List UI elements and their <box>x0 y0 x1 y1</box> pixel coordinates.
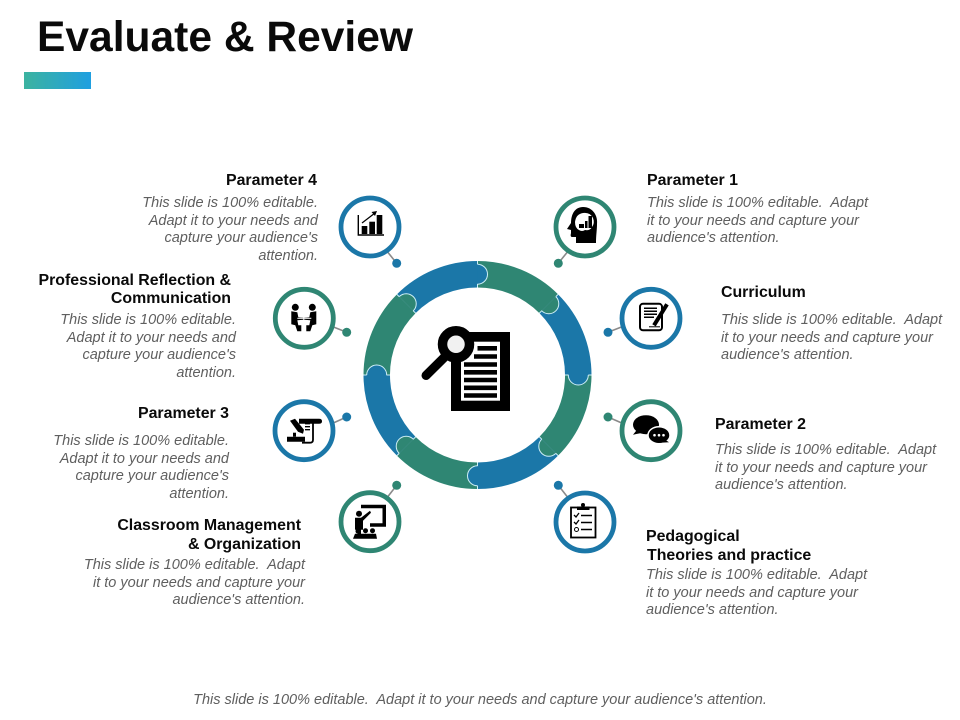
text: Curriculum: This slide is 100% editable. Adapt <box>721 312 943 328</box>
ring <box>275 402 333 460</box>
connector <box>386 250 401 268</box>
node: Parameter 3 <box>275 402 351 460</box>
text: Curriculum: Curriculum <box>721 284 806 301</box>
text: Pedagogical Theories and practice: Pedagogical <box>646 528 740 545</box>
node: Pedagogical <box>554 481 614 551</box>
icon: notepad and pen <box>640 304 667 330</box>
text: Parameter 2: it to your needs and capture your <box>715 460 928 476</box>
connector <box>604 326 624 337</box>
text: Parameter 2: This slide is 100% editable. Adapt <box>715 442 937 458</box>
text: Classroom Management & Organization: it to your needs and capture your <box>93 575 306 591</box>
text: Parameter 2 <box>715 416 937 493</box>
footer note: This slide is 100% editable. Adapt it to your needs and capture your audience's attention. <box>193 692 767 708</box>
text: Parameter 3: attention. <box>169 486 229 502</box>
text: Professional Reflection & Communication: attention. <box>176 365 236 381</box>
ring <box>341 493 399 551</box>
text: Curriculum: audience's attention. <box>721 347 854 363</box>
icon: bar chart <box>358 211 384 235</box>
connector <box>331 326 351 337</box>
ring <box>622 289 680 347</box>
text: Parameter 4: capture your audience's <box>164 230 318 246</box>
text: Classroom Management & Organization <box>84 517 306 608</box>
icon: scroll and quill <box>287 419 322 443</box>
text: Professional Reflection & Communication <box>38 272 237 381</box>
text: Pedagogical Theories and practice: it to your needs and capture your <box>646 585 859 601</box>
ring <box>556 493 614 551</box>
text: Professional Reflection & Communication: capture your audience's <box>82 347 236 363</box>
node: Professional Reflection <box>275 289 351 347</box>
text: Parameter 3: Adapt it to your needs and <box>59 451 230 467</box>
text: Pedagogical Theories and practice: This slide is 100% editable. Adapt <box>646 567 868 583</box>
connector <box>331 412 351 424</box>
text: Parameter 1: it to your needs and capture your <box>647 213 860 229</box>
text: Pedagogical Theories and practice <box>646 528 868 618</box>
node: Classroom Management <box>341 481 401 551</box>
node: Curriculum <box>604 289 680 347</box>
text: Parameter 4: This slide is 100% editable. <box>142 195 318 211</box>
text: Parameter 2: audience's attention. <box>715 477 848 493</box>
connector <box>554 481 569 499</box>
puzzle ring <box>340 237 615 513</box>
text: Professional Reflection & Communication: This slide is 100% editable. <box>60 312 236 328</box>
text: Classroom Management & Organization: & Organization <box>188 536 301 553</box>
text: Professional Reflection & Communication: Professional Reflection & <box>38 272 231 289</box>
text: Parameter 2: Parameter 2 <box>715 416 806 433</box>
ring <box>275 289 333 347</box>
icon: head with puzzle brain <box>567 207 597 243</box>
connector <box>554 250 569 268</box>
text: Parameter 3: capture your audience's <box>75 468 229 484</box>
text: Classroom Management & Organization: Classroom Management <box>117 517 302 534</box>
text: Parameter 1: This slide is 100% editable. Adapt <box>647 195 869 211</box>
icon: clipboard checklist <box>571 503 596 538</box>
title: Evaluate & Review <box>37 13 414 61</box>
text: Parameter 1: Parameter 1 <box>647 172 738 189</box>
text: Parameter 3: This slide is 100% editable. <box>53 433 229 449</box>
node: Parameter 4 <box>341 198 401 268</box>
node: Parameter 1 <box>554 198 614 268</box>
ring <box>622 402 680 460</box>
text: Curriculum: it to your needs and capture your <box>721 330 934 346</box>
text: Pedagogical Theories and practice: audience's attention. <box>646 602 779 618</box>
text: Parameter 1: audience's attention. <box>647 230 780 246</box>
text: Parameter 3 <box>53 405 230 502</box>
ring <box>556 198 614 256</box>
icon: two people at a table <box>291 304 316 331</box>
text: Parameter 4: Parameter 4 <box>226 172 317 189</box>
text: Parameter 4: attention. <box>258 248 318 264</box>
node: Parameter 2 <box>604 402 680 460</box>
ring <box>341 198 399 256</box>
connector <box>386 481 401 499</box>
icon: document with magnifier <box>426 331 510 411</box>
text: Classroom Management & Organization: audience's attention. <box>172 592 305 608</box>
text: Pedagogical Theories and practice: Theories and practice <box>647 547 811 564</box>
text: Parameter 4 <box>142 172 319 264</box>
text: Curriculum <box>721 284 943 363</box>
text: Parameter 1 <box>647 172 869 246</box>
icon: chat bubbles <box>633 415 670 444</box>
text: Parameter 3: Parameter 3 <box>138 405 229 422</box>
text: Professional Reflection & Communication: Adapt it to your needs and <box>66 330 237 346</box>
text: Professional Reflection & Communication: Communication <box>111 290 231 307</box>
connector <box>604 412 624 424</box>
title accent bar <box>24 72 91 89</box>
text: Parameter 4: Adapt it to your needs and <box>148 213 319 229</box>
text: Classroom Management & Organization: This slide is 100% editable. Adapt <box>84 557 306 573</box>
icon: presenter with audience <box>353 505 386 539</box>
